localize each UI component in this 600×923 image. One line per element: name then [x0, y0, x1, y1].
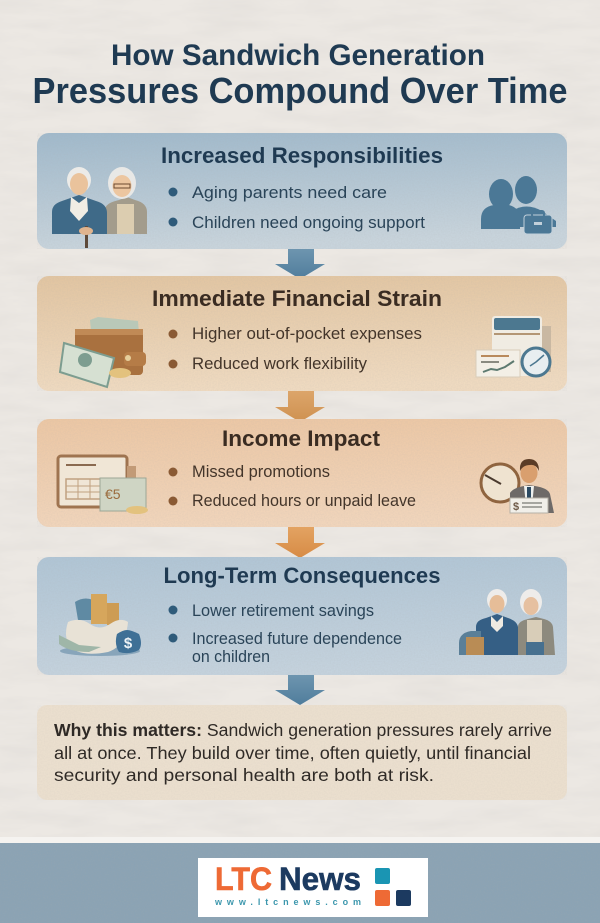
logo: LTC	[215, 861, 272, 897]
icon: wallet and cash	[60, 317, 146, 387]
callout text	[54, 720, 552, 785]
bullet list: Children need ongoing support	[192, 213, 425, 232]
bullet list: Lower retirement savings	[192, 601, 374, 620]
icon: elderly couple with package	[459, 589, 555, 655]
bullet list: Aging parents need care	[192, 183, 387, 202]
icon: schedule and cash	[58, 456, 148, 514]
logo: News	[279, 861, 361, 897]
icon: calendar, chart and clock	[476, 316, 551, 377]
heading: Immediate Financial Strain	[152, 286, 442, 311]
bullet list: Higher out-of-pocket expenses	[192, 324, 422, 343]
arrow	[275, 391, 325, 422]
bullet list: Reduced hours or unpaid leave	[192, 491, 416, 510]
callout text: Why this matters: Sandwich generation pressures rarely arrive	[54, 720, 552, 740]
heading: Increased Responsibilities	[161, 143, 443, 168]
heading: Income Impact	[222, 426, 381, 451]
title	[32, 39, 568, 111]
panel: increased responsibilities	[37, 133, 567, 249]
heading: Long-Term Consequences	[164, 563, 440, 588]
logo: www.ltcnews.com	[214, 897, 361, 907]
bullet list: Reduced work flexibility	[192, 354, 367, 373]
bullet list	[168, 601, 402, 666]
icon: money bag with coins	[59, 594, 141, 656]
bullet list: Increased future dependence	[192, 629, 402, 648]
bullet list	[168, 462, 416, 510]
arrow	[275, 675, 325, 705]
footer band	[0, 837, 600, 923]
title: How Sandwich Generation	[111, 39, 485, 72]
arrow	[275, 527, 325, 558]
panel: immediate financial strain	[37, 276, 567, 391]
logo	[198, 858, 428, 917]
arrow	[275, 249, 325, 279]
icon: money bag with coins: $	[124, 635, 133, 652]
bullet list	[168, 324, 422, 373]
icon: clock and businessman: $	[513, 501, 519, 513]
icon: elderly couple	[52, 167, 147, 248]
title: Pressures Compound Over Time	[32, 70, 568, 111]
icon: clock and businessman	[481, 459, 554, 513]
callout text: security and personal health are both at risk.	[54, 765, 434, 785]
panel: income impact	[37, 419, 567, 527]
bullet list	[168, 183, 425, 232]
bullet list: Missed promotions	[192, 462, 330, 481]
icon: schedule and cash: €5	[105, 486, 121, 502]
icon: adult and child silhouettes with bag	[481, 176, 556, 234]
panel: long-term consequences	[37, 557, 567, 675]
callout text: all at once. They build over time, often quietly, until financial	[54, 743, 531, 763]
panel: why this matters	[37, 705, 567, 800]
bullet list: on children	[192, 647, 270, 666]
